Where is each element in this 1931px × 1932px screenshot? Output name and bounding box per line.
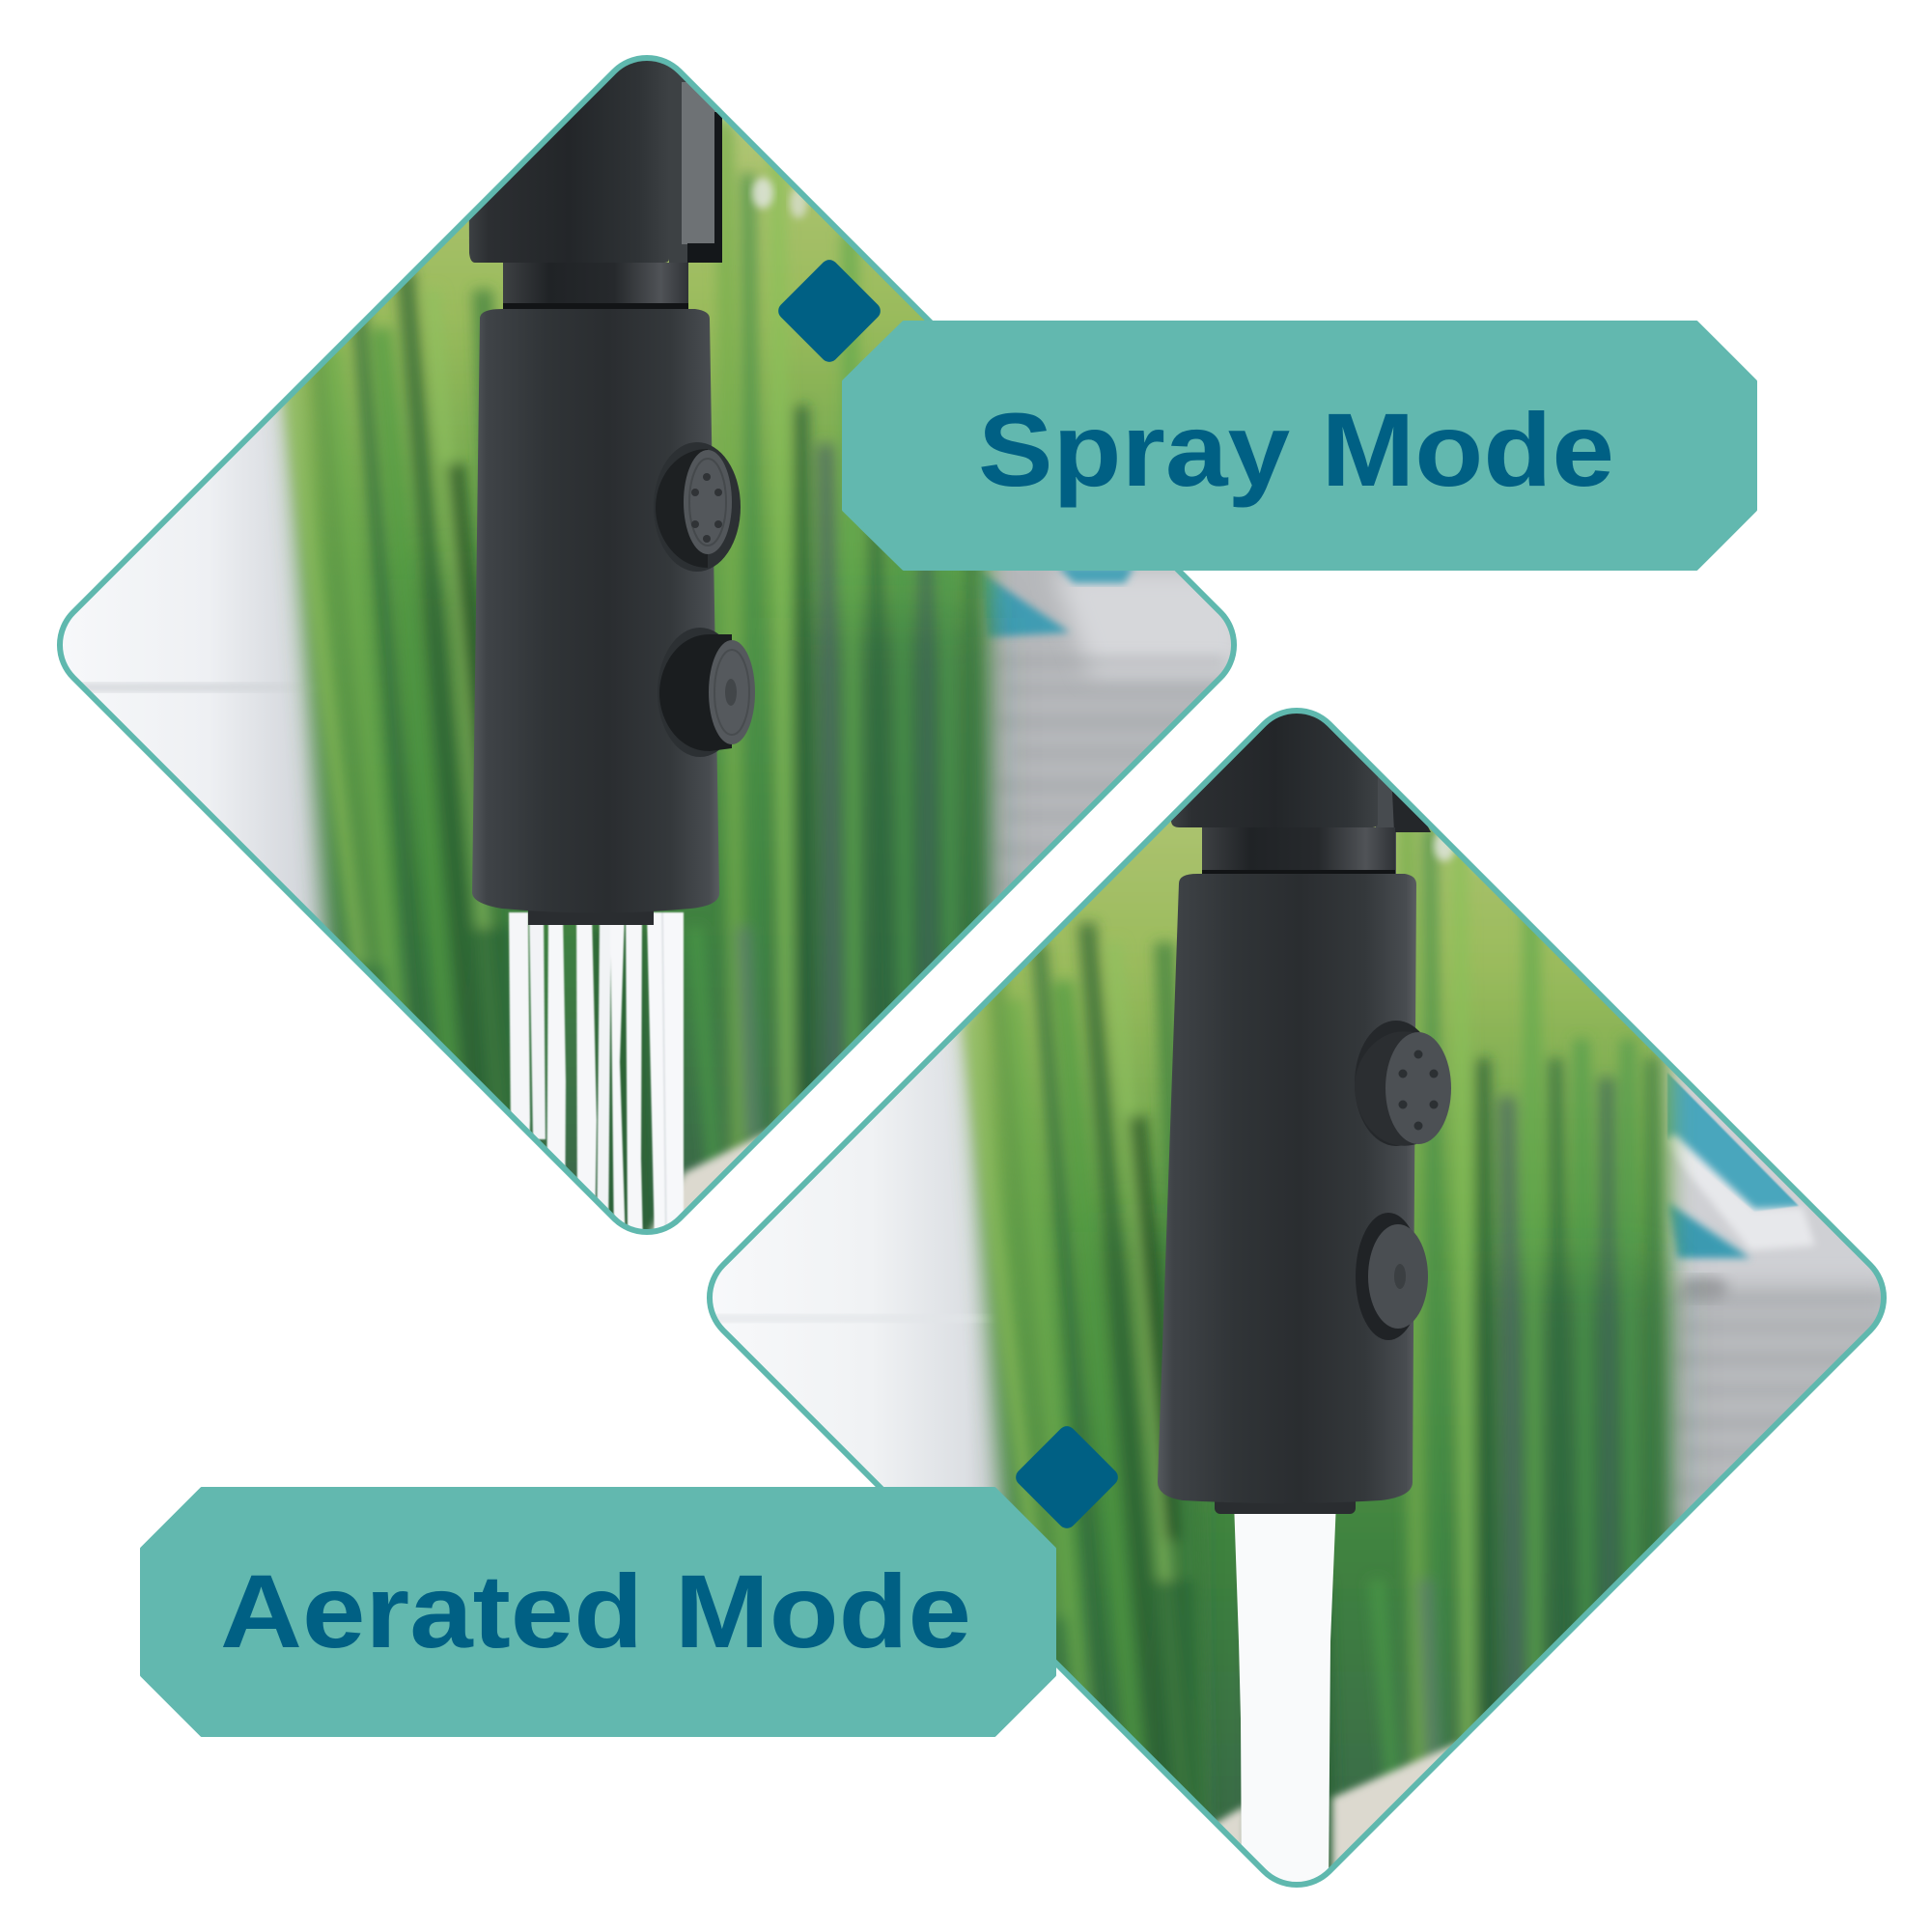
label: aerated mode [142, 1489, 1054, 1735]
photo: aerated mode faucet [695, 695, 1923, 1927]
panel: spray mode photo diamond [39, 39, 1255, 1274]
nozzle [528, 910, 654, 925]
teal cushion [977, 570, 1070, 637]
icon: spray marker diamond [774, 256, 884, 366]
nozzle [1215, 1487, 1356, 1514]
beige ledge [1188, 1806, 1245, 1921]
spray water [509, 912, 684, 1246]
heading: aerated mode: Aerated Mode [220, 1553, 971, 1669]
aerated button [658, 628, 755, 757]
heading: spray mode: Spray Mode [978, 391, 1614, 508]
fabric background [979, 571, 1228, 913]
collar [1202, 827, 1395, 872]
fabric background [1651, 1014, 1912, 1564]
faucet neck [1171, 695, 1378, 827]
bracket [1376, 753, 1431, 874]
beige ledge [645, 1125, 769, 1229]
collar [503, 263, 688, 305]
faucet body [1158, 874, 1416, 1503]
spray button [1355, 1021, 1451, 1146]
spray button [654, 442, 741, 572]
icon: aerated marker diamond [1012, 1422, 1122, 1532]
grass [947, 769, 1670, 1927]
bracket [669, 67, 722, 263]
label: spray mode [844, 322, 1755, 569]
photo: spray mode faucet [39, 39, 1255, 1274]
faucet neck [469, 61, 669, 263]
diamond outline [690, 691, 1903, 1904]
grass [266, 116, 989, 1274]
aerated button [1356, 1213, 1428, 1340]
aerated water stream [1234, 1501, 1336, 1892]
wall background [63, 400, 340, 940]
wall background [695, 695, 1081, 1902]
teal cushion [1667, 1073, 1799, 1212]
panel: aerated mode photo diamond [690, 691, 1923, 1927]
faucet body [472, 309, 719, 913]
diamond outline [41, 39, 1253, 1251]
